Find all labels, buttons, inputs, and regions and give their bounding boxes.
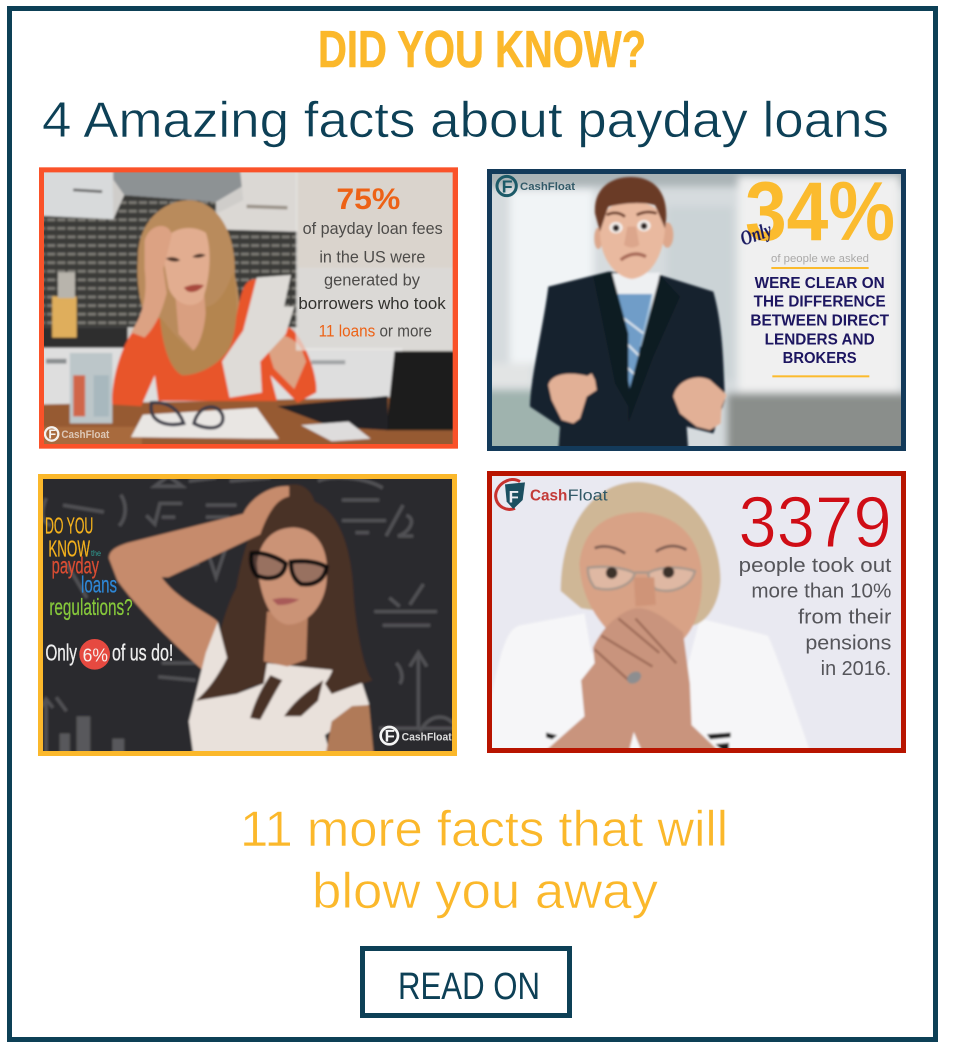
headline: regulations?: [49, 594, 133, 620]
button: read on: READ ON: [398, 966, 540, 1008]
photo: shrugging man in suit: [492, 174, 901, 446]
panel: do you know the payday loans regulations: [38, 474, 457, 759]
description: people took out: [739, 554, 892, 577]
teaser text: blow you away: [312, 863, 658, 919]
stat text: [298, 183, 446, 340]
stat: only 6% of us do: Only: [45, 639, 77, 665]
stat text: 11 loans or more: [319, 321, 432, 340]
title: DID YOU KNOW?: [318, 21, 646, 79]
statement: [750, 275, 889, 367]
border: [487, 169, 906, 451]
panel: only 34% clear on lenders and brokers: [487, 169, 906, 451]
panel: 75% of payday loan fees: [39, 167, 458, 449]
logo: CashFloat colour: F: [509, 487, 519, 506]
teaser text: [240, 801, 728, 919]
logo: CashFloat white: [381, 727, 452, 746]
logo: CashFloat colour: Float: [568, 488, 609, 505]
statement: BROKERS: [783, 350, 857, 367]
logo: CashFloat colour: Cash: [530, 488, 567, 505]
panel: 3379 people took out pensions: [487, 471, 906, 753]
logo: CashFloat: [497, 176, 575, 197]
photo: shocked older woman: [488, 472, 905, 752]
border: [38, 474, 457, 756]
teaser text: 11 more facts that will: [240, 801, 728, 857]
photo: woman with glasses at chalkboard: [39, 475, 456, 759]
logo: CashFloat white: [45, 427, 110, 442]
subtitle: 4 Amazing facts about payday loans: [42, 92, 889, 148]
headline: DO YOU: [45, 512, 93, 538]
statement: BETWEEN DIRECT: [750, 313, 889, 330]
stat text: generated by: [324, 271, 421, 290]
stat text: borrowers who took: [298, 294, 446, 313]
logo: CashFloat colour: [496, 480, 609, 509]
stat text: in the US were: [319, 247, 425, 266]
rule: [771, 267, 869, 269]
photo: stressed woman in kitchen: [40, 168, 457, 448]
description: from their: [798, 605, 891, 628]
stat: only 6% of us do: 6%: [83, 645, 108, 666]
statement: LENDERS AND: [765, 331, 875, 348]
statement: THE DIFFERENCE: [754, 294, 886, 311]
label: Only: Only: [737, 217, 775, 251]
logo: CashFloat white: F: [48, 428, 56, 442]
description: pensions: [805, 631, 891, 654]
stat text: 75%: [336, 183, 400, 216]
rule: [772, 375, 869, 377]
stat text: of payday loan fees: [303, 219, 443, 238]
logo: CashFloat white: CashFloat: [402, 731, 452, 743]
border: [487, 471, 906, 753]
description: [739, 554, 892, 680]
headline: the: [91, 548, 101, 558]
stat: only 6% of us do: [45, 639, 173, 670]
stat: only 6% of us do: of us do!: [112, 639, 173, 665]
stat: 34%: 34%: [745, 165, 895, 258]
border: [39, 167, 458, 449]
headline: loans: [81, 572, 117, 598]
headline: payday: [52, 552, 99, 578]
description: more than 10%: [751, 580, 891, 603]
logo: CashFloat white: CashFloat: [61, 429, 110, 441]
stat: 3379: 3379: [738, 482, 892, 563]
button: read on: [362, 948, 570, 1016]
description: in 2016.: [821, 657, 891, 680]
logo: CashFloat white: F: [385, 727, 395, 746]
headline: [45, 512, 133, 620]
logo: CashFloat: CashFloat: [520, 181, 575, 193]
headline: KNOW: [48, 536, 90, 562]
logo: CashFloat: F: [502, 177, 513, 197]
caption: of people we asked: [771, 253, 869, 265]
statement: WERE CLEAR ON: [755, 275, 885, 292]
